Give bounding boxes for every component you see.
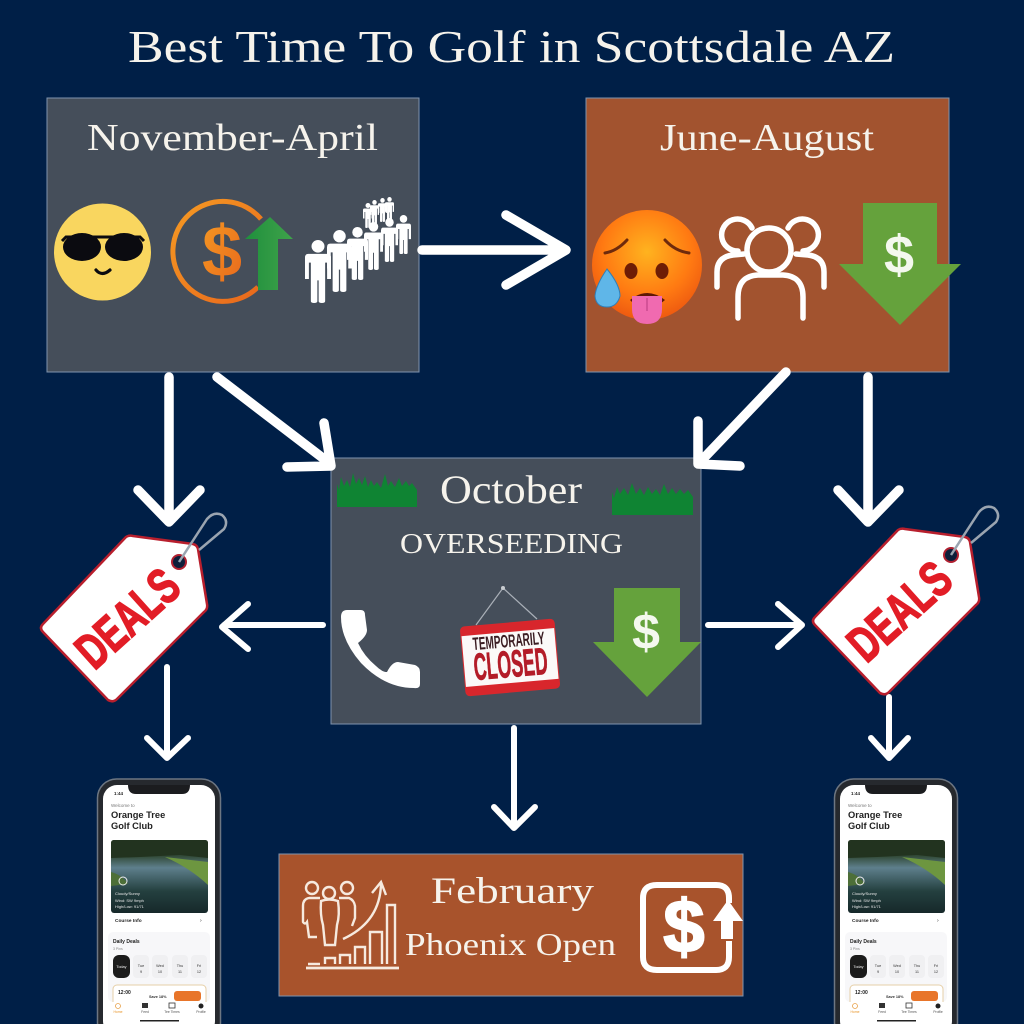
phone: right app screen: › (937, 918, 939, 924)
phone: left app screen: Home (113, 1010, 123, 1014)
phone: left app screen: Save 18% (149, 995, 167, 999)
icon: telephone (341, 610, 420, 688)
phone: right app screen: Course Info (852, 918, 879, 924)
title: Best Time To Golf in Scottsdale AZ (128, 21, 895, 72)
phone: right app screen: Daily Deals (850, 939, 877, 945)
phone: right app screen: 1:44 (851, 791, 861, 796)
phone: left app screen: Wind: SW 9mph (115, 898, 144, 903)
phone: left app screen: Cloudy/Sunny (115, 891, 140, 896)
phone: left app screen: Thu (177, 964, 183, 968)
phone: right app screen: 10 (895, 970, 899, 974)
icon: price down arrow (593, 588, 701, 697)
icon: price down arrow: $ (884, 225, 914, 285)
phone: right app screen: 11 (915, 970, 919, 974)
phone: left app screen: 10 (158, 970, 162, 974)
icon: dollar price up: $ (663, 885, 705, 968)
subheading: Phoenix Open: Phoenix Open (405, 926, 616, 962)
icon: long queue of people (305, 197, 411, 303)
arrow: June-August to October (698, 372, 786, 466)
arrow: left deals to phone (147, 667, 188, 758)
phone: right app screen: Tee Times (901, 1010, 917, 1014)
phone: right app screen: Wed (893, 964, 901, 968)
phone: right app screen: Thu (914, 964, 920, 968)
phone: right app screen: Tue (875, 964, 881, 968)
phone: left app screen: 9 (140, 970, 142, 974)
icon: rising price: $ (202, 212, 242, 292)
phone: right app screen: Today (853, 965, 864, 969)
phone: left app screen: Golf Club (111, 821, 153, 831)
icon: rising price (173, 201, 293, 301)
arrow: October to left deals (222, 604, 323, 649)
phone: right app screen: Orange Tree (848, 810, 902, 820)
phone: left app screen: 1:44 (114, 791, 124, 796)
heading: November-April: November-April (87, 117, 378, 159)
arrow: October down to February (494, 728, 535, 828)
panel: June-August (586, 98, 961, 372)
icon: sunglasses emoji (54, 204, 151, 300)
phone: right app screen: High/Low: 91/71 (852, 904, 882, 909)
phone: right app screen: 12 (934, 970, 938, 974)
icon: hot face emoji (592, 210, 702, 324)
icon: grass left (337, 473, 417, 507)
phone: left app screen: High/Low: 91/71 (115, 904, 145, 909)
icon: price down arrow (839, 203, 961, 325)
icon: temporarily closed sign: CLOSED (472, 641, 549, 689)
phone: left app screen: Tue (138, 964, 144, 968)
arrow: November-April to June-August (422, 215, 566, 285)
phone: left app screen: Orange Tree (111, 810, 165, 820)
arrow: right deals to phone (871, 697, 908, 758)
icon: temporarily closed sign (460, 586, 560, 696)
phone: right app screen: Feed (878, 1010, 886, 1014)
phone: left app screen: 11 (178, 970, 182, 974)
panel: November-April (47, 98, 419, 372)
arrow: October to right deals (708, 604, 802, 647)
phone: right app screen: Cloudy/Sunny (852, 891, 877, 896)
arrow: June-August down to deals (838, 377, 899, 522)
phone: left app screen: Feed (141, 1010, 149, 1014)
phone: right app screen: 3 Pins (850, 947, 860, 951)
tag: left deals: DEALS (64, 557, 191, 679)
phone: left app screen: 12 (197, 970, 201, 974)
icon: temporarily closed sign: TEMPORARILY (472, 628, 545, 654)
phone: right app screen (834, 779, 958, 1024)
icon: small group outline (717, 219, 824, 318)
phone: right app screen: Welcome to (848, 803, 872, 808)
phone: left app screen: Today (116, 965, 127, 969)
phone: left app screen: Fri (197, 964, 201, 968)
subheading: overseeding: OVERSEEDING (400, 528, 623, 560)
phone: left app screen: Course Info (115, 918, 142, 924)
phone: right app screen: Home (850, 1010, 860, 1014)
heading: October: October (440, 467, 582, 512)
heading: June-August: June-August (660, 117, 874, 159)
arrow: November-April down to deals (138, 377, 200, 522)
phone: left app screen: 12:00 (118, 990, 131, 996)
tag: right deals: DEALS (836, 550, 963, 672)
phone: left app screen (98, 779, 220, 1024)
phone: right app screen: 12:00 (855, 990, 868, 996)
icon: grass right (612, 483, 693, 515)
arrow: November-April to October (217, 377, 331, 467)
phone: right app screen: 9 (877, 970, 879, 974)
panel: February Phoenix Open (279, 854, 743, 996)
phone: left app screen: Wed (156, 964, 164, 968)
phone: left app screen: Tee Times (164, 1010, 180, 1014)
phone: right app screen: Profile (933, 1010, 943, 1014)
phone: left app screen: Daily Deals (113, 939, 140, 945)
icon: dollar price up (643, 885, 743, 970)
icon: crowd growth chart (303, 882, 399, 968)
phone: left app screen: Profile (196, 1010, 206, 1014)
phone: right app screen: Golf Club (848, 821, 890, 831)
phone: left app screen: Welcome to (111, 803, 135, 808)
phone: right app screen: Wind: SW 9mph (852, 898, 881, 903)
heading: February: February (431, 871, 595, 912)
icon: price down arrow: $ (632, 604, 660, 660)
panel: October overseeding (331, 458, 701, 724)
phone: right app screen: Fri (934, 964, 938, 968)
phone: left app screen: 3 Pins (113, 947, 123, 951)
phone: left app screen: › (200, 918, 202, 924)
phone: right app screen: Save 18% (886, 995, 904, 999)
